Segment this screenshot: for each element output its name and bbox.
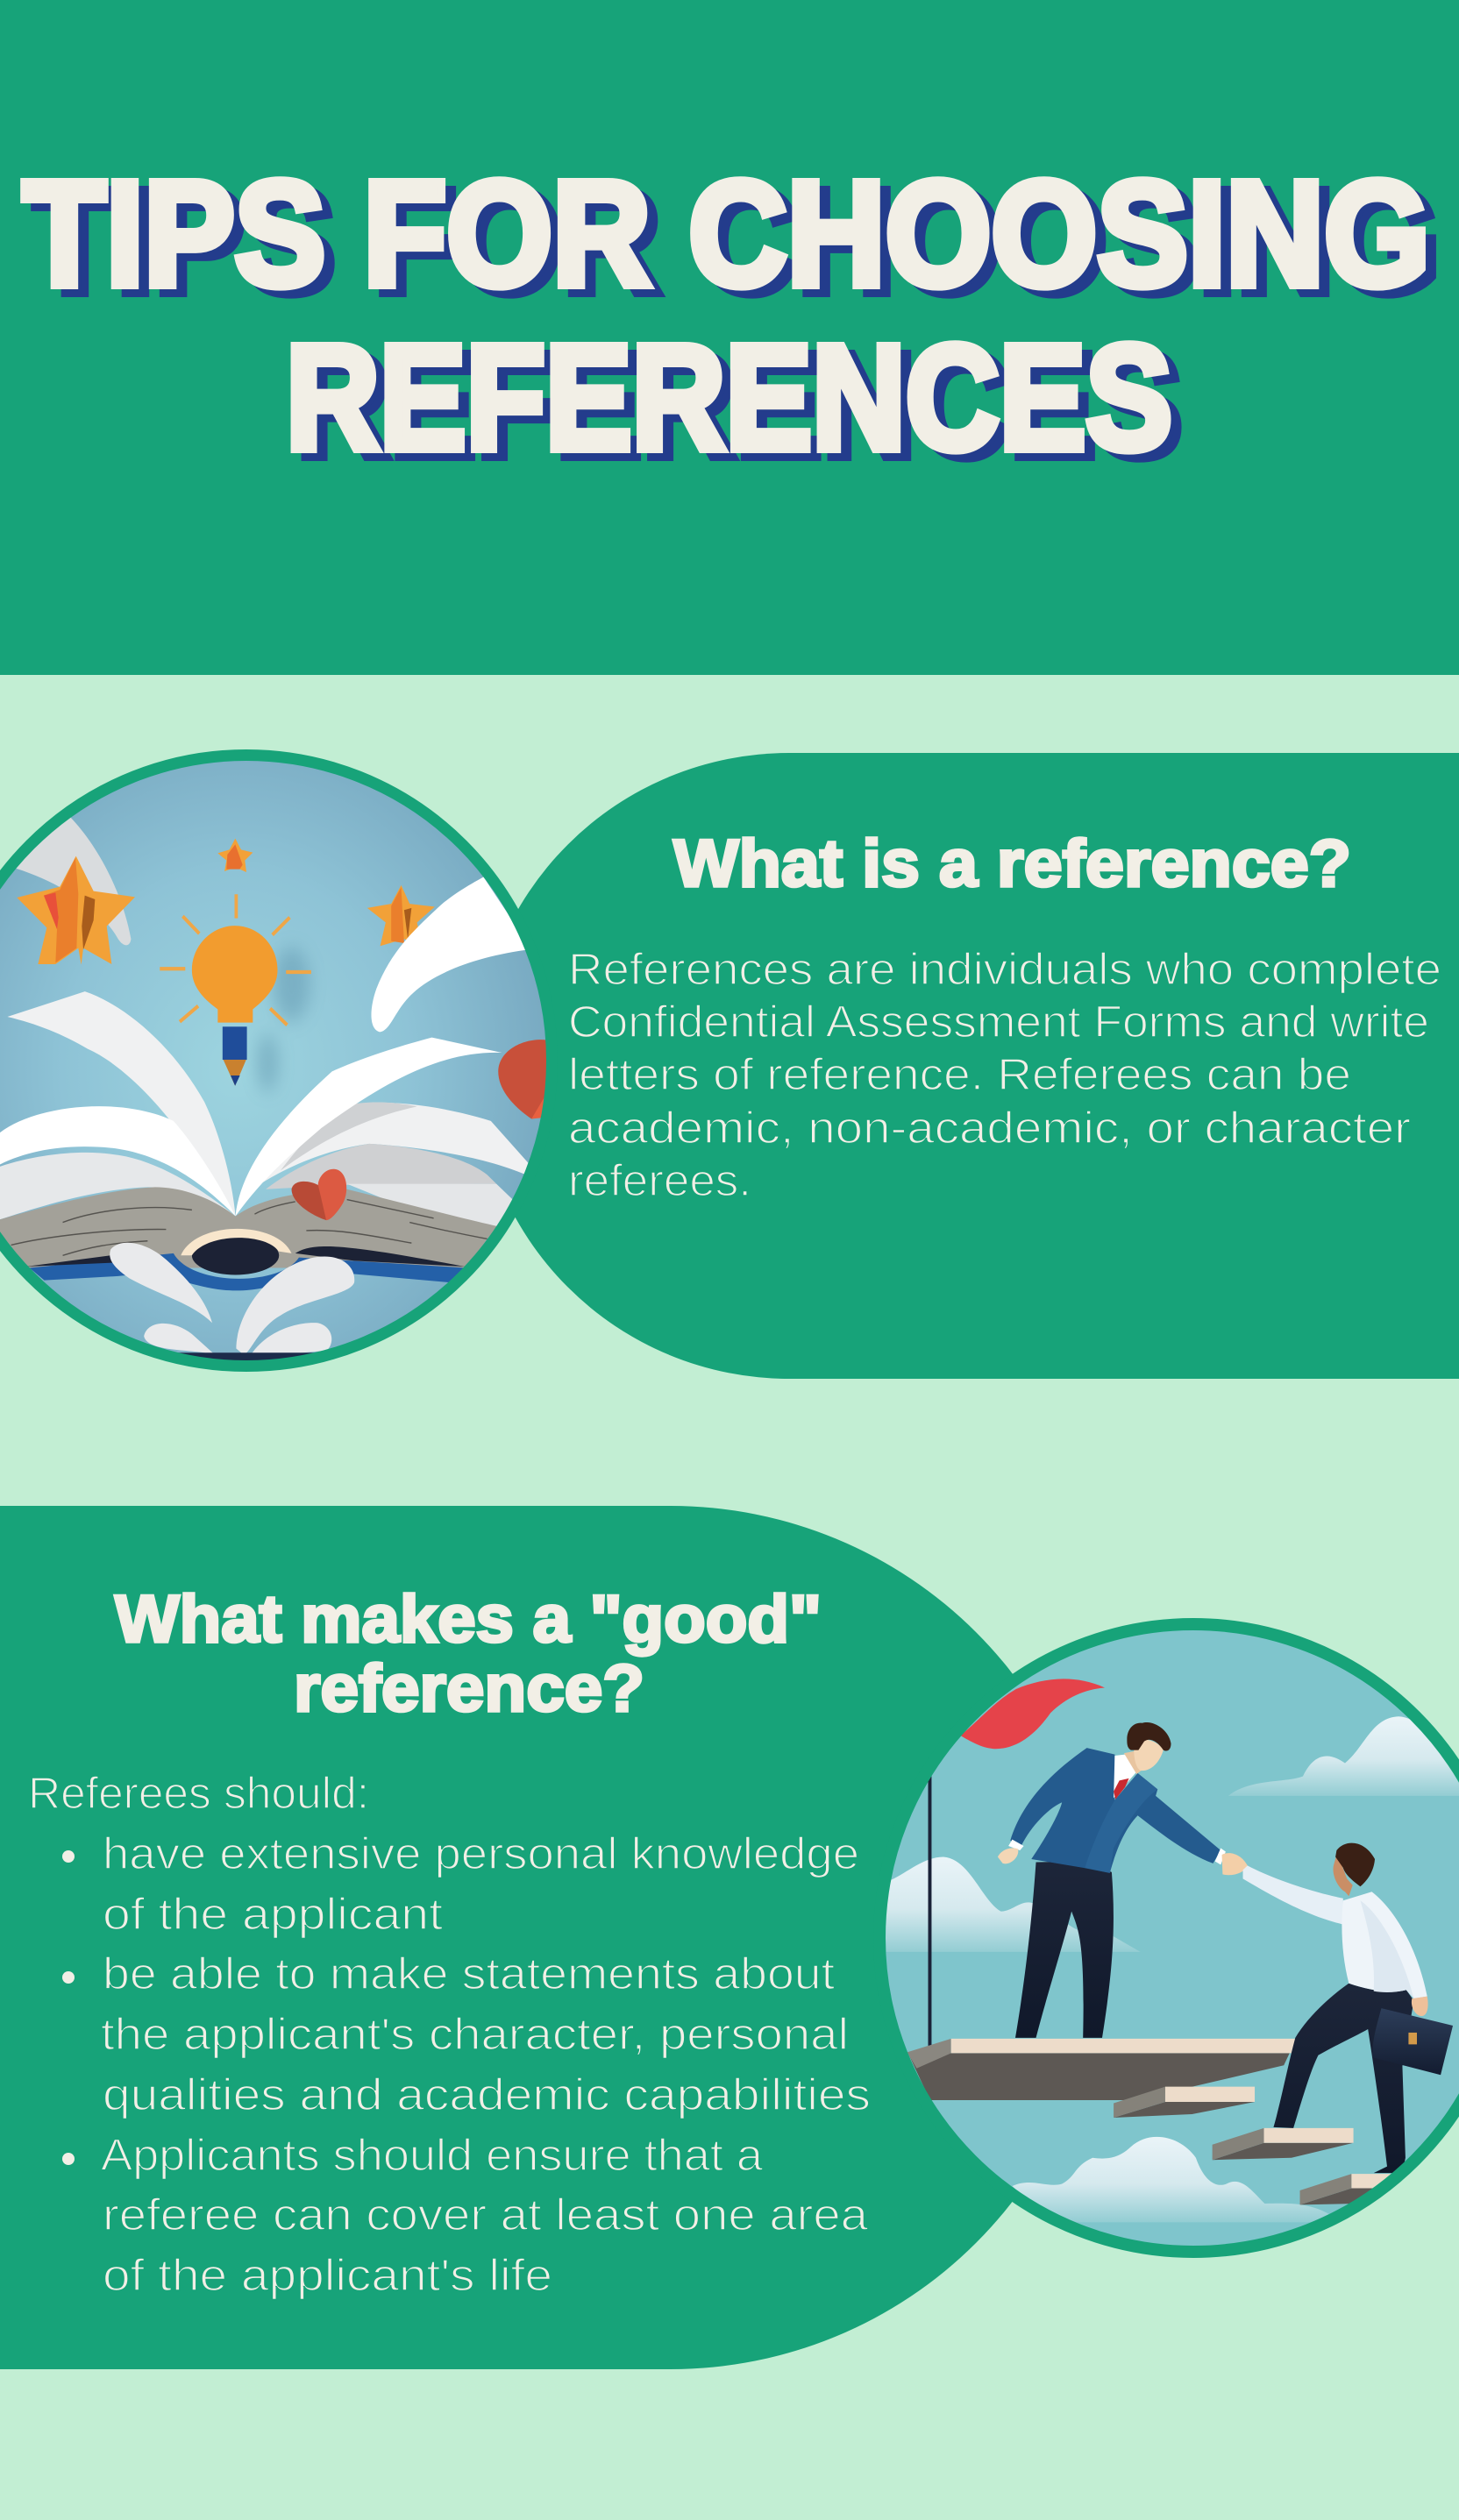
icon: right star [367,885,435,946]
ring [879,1624,1459,2252]
figure: man in white shirt with briefcase [1243,1843,1453,2173]
body text: definition: referees. [568,1155,751,1205]
icon: light bulb [160,894,311,1025]
ring [0,756,552,1366]
title: REFERENCES [296,323,1183,489]
platform and steps [907,2039,1402,2204]
clouds [882,1716,1459,2222]
icon: small star [217,839,253,872]
body text: definition: letters of reference. Referees can be [568,1049,1351,1099]
bullet list: the applicant's character, personal [101,2009,849,2059]
bullet list: Applicants should ensure that a [101,2130,764,2180]
icon: large star [17,856,135,965]
page: curling right [371,877,531,1032]
icon: pencil [223,1026,247,1086]
heading: what makes a good reference [115,1582,822,1726]
back page top left [16,817,132,945]
book pages [0,991,531,1229]
text: referees should: Referees should: [28,1768,369,1818]
bullet list: referee can cover at least one area [103,2190,869,2240]
icon: bulb shadow [257,948,310,1092]
bullet list: of the applicant [103,1889,443,1939]
heading: what is a reference: What is a reference? [673,827,1351,901]
icon: book block [0,1187,498,1267]
panel: what is a reference [476,753,1459,1379]
icon: briefcase [1372,2008,1453,2075]
icon: red heart right [498,1040,550,1119]
heading: what makes a good reference: reference? [294,1651,644,1726]
title [23,151,1441,489]
bullet list: qualities and academic capabilities [103,2069,871,2119]
body text: definition: academic, non-academic, or character [568,1103,1411,1153]
icon: stars [17,839,253,965]
icon: book spine and cover [25,1229,465,1290]
bullet list: of the applicant's life [103,2250,552,2300]
bullet list [62,1828,871,2300]
header band [0,0,1459,675]
page curls at the bottom [110,1243,354,1355]
icon: flag and pole [929,1679,1105,2051]
heading: what makes a good reference: What makes a "good" [115,1582,822,1657]
panel shape [0,1506,1103,2369]
bullet list: have extensive personal knowledge [103,1828,859,1878]
body text: definition: Confidential Assessment Forms and write [568,997,1429,1047]
body text: definition [568,944,1441,1205]
title: REFERENCES [286,315,1172,481]
illustration: businessman helping colleague up steps [886,1618,1459,2258]
panel shape [476,753,1459,1379]
panel: what makes a good reference [0,1506,1103,2369]
icon: red heart centre [292,1169,346,1220]
illustration: open book with lightbulb [0,749,546,1372]
figure: man in blue suit [998,1722,1248,2038]
bullet list: be able to make statements about [103,1949,835,1998]
body text: definition: References are individuals who complete [568,944,1441,994]
